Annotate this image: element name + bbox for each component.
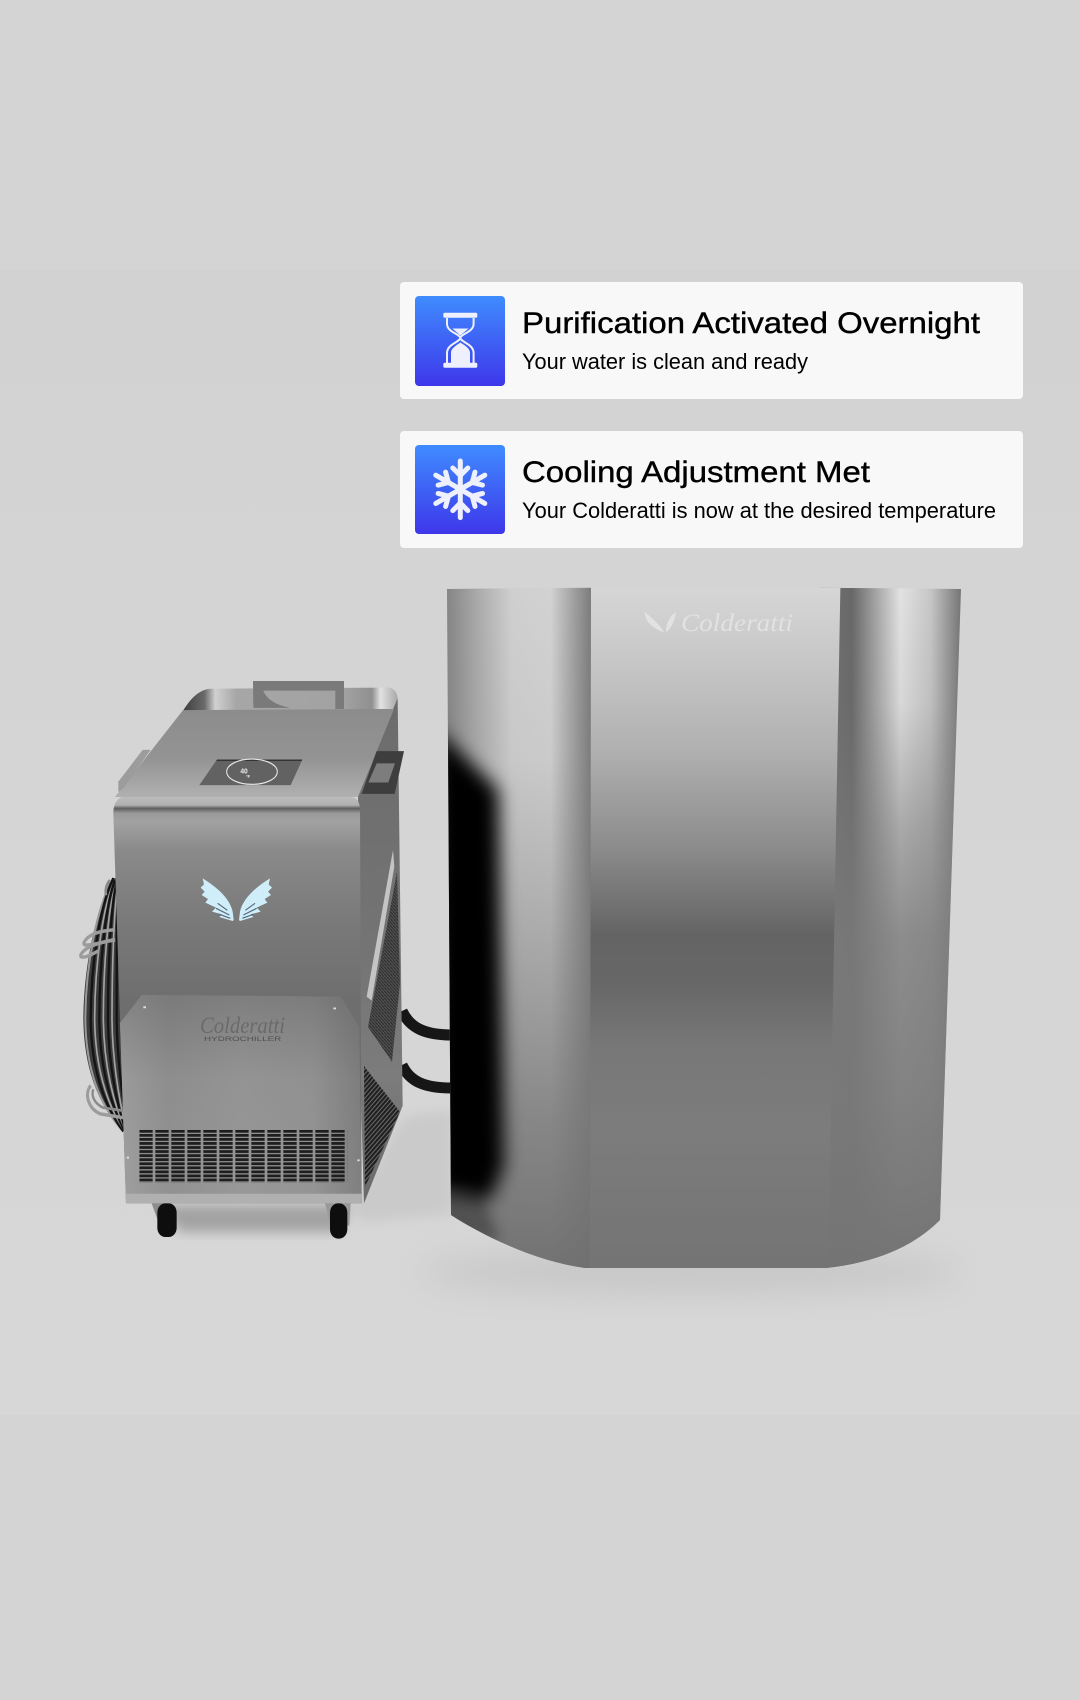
- panel screws: [127, 1006, 360, 1161]
- side branding strip: [367, 850, 394, 1001]
- right wheel: [325, 1203, 351, 1239]
- screen top edge: [216, 759, 302, 761]
- water tank: [435, 580, 965, 1280]
- icon tile: hourglass: [415, 296, 505, 386]
- temperature unit: °F: [246, 774, 250, 779]
- tank right panel shading: [828, 679, 955, 1268]
- glowing wings logo: [201, 878, 272, 921]
- right side handle: [362, 751, 404, 794]
- card title: Cooling Adjustment Met: [522, 456, 871, 489]
- lower-left tank shade: [450, 1190, 500, 1240]
- tank logo wordmark: Colderatti: [681, 610, 793, 637]
- card subtitle: Your Colderatti is now at the desired temperature: [522, 498, 996, 523]
- tank right panel: [820, 580, 965, 1280]
- infographic scene: [79, 282, 1023, 1288]
- left wheel: [152, 1203, 177, 1237]
- side mesh upper: [368, 872, 400, 1062]
- notification card: cooling: [400, 431, 1023, 548]
- card title: Purification Activated Overnight: [522, 307, 981, 340]
- front vent grille: [139, 1130, 347, 1183]
- dark reflection on tank: [435, 728, 504, 1200]
- dial ring: [227, 759, 277, 784]
- left wing: [201, 878, 234, 921]
- floor shadow beside chiller: [350, 1110, 452, 1222]
- right wing: [239, 878, 272, 921]
- hoses linking chiller to tank: [402, 1011, 452, 1088]
- front face: [113, 797, 362, 1203]
- icon tile: snowflake: [415, 445, 505, 534]
- panel bottom lip: [126, 1194, 362, 1203]
- tank left panel shading: [450, 764, 590, 1268]
- floor shadow under tank: [420, 1250, 960, 1294]
- lower panel shading: [120, 995, 362, 1203]
- tank logo: [644, 612, 792, 632]
- chiller unit: [81, 681, 404, 1239]
- card subtitle: Your water is clean and ready: [522, 349, 808, 374]
- top face: [115, 709, 394, 797]
- tank left panel: [440, 580, 591, 1280]
- card background: [400, 431, 1023, 548]
- card background: [400, 282, 1023, 399]
- panel model name: HYDROCHILLER: [204, 1037, 281, 1043]
- control screen: [199, 759, 302, 785]
- top carry handle: [253, 681, 344, 709]
- tank center panel: [590, 580, 840, 1280]
- left side handle: [118, 750, 151, 792]
- coil: [81, 878, 160, 1131]
- temperature reading: 40: [240, 767, 248, 775]
- lower front panel: [120, 995, 362, 1203]
- rear tray wall: [183, 688, 398, 714]
- handle grip opening: [368, 763, 395, 782]
- panel wordmark: Colderatti: [200, 1013, 285, 1038]
- tank logo wings: [644, 611, 676, 632]
- right side panel: [358, 698, 403, 1203]
- floor shadow under chiller: [160, 1205, 350, 1232]
- side mesh lower: [364, 1066, 400, 1187]
- notification card: purification: [400, 282, 1023, 399]
